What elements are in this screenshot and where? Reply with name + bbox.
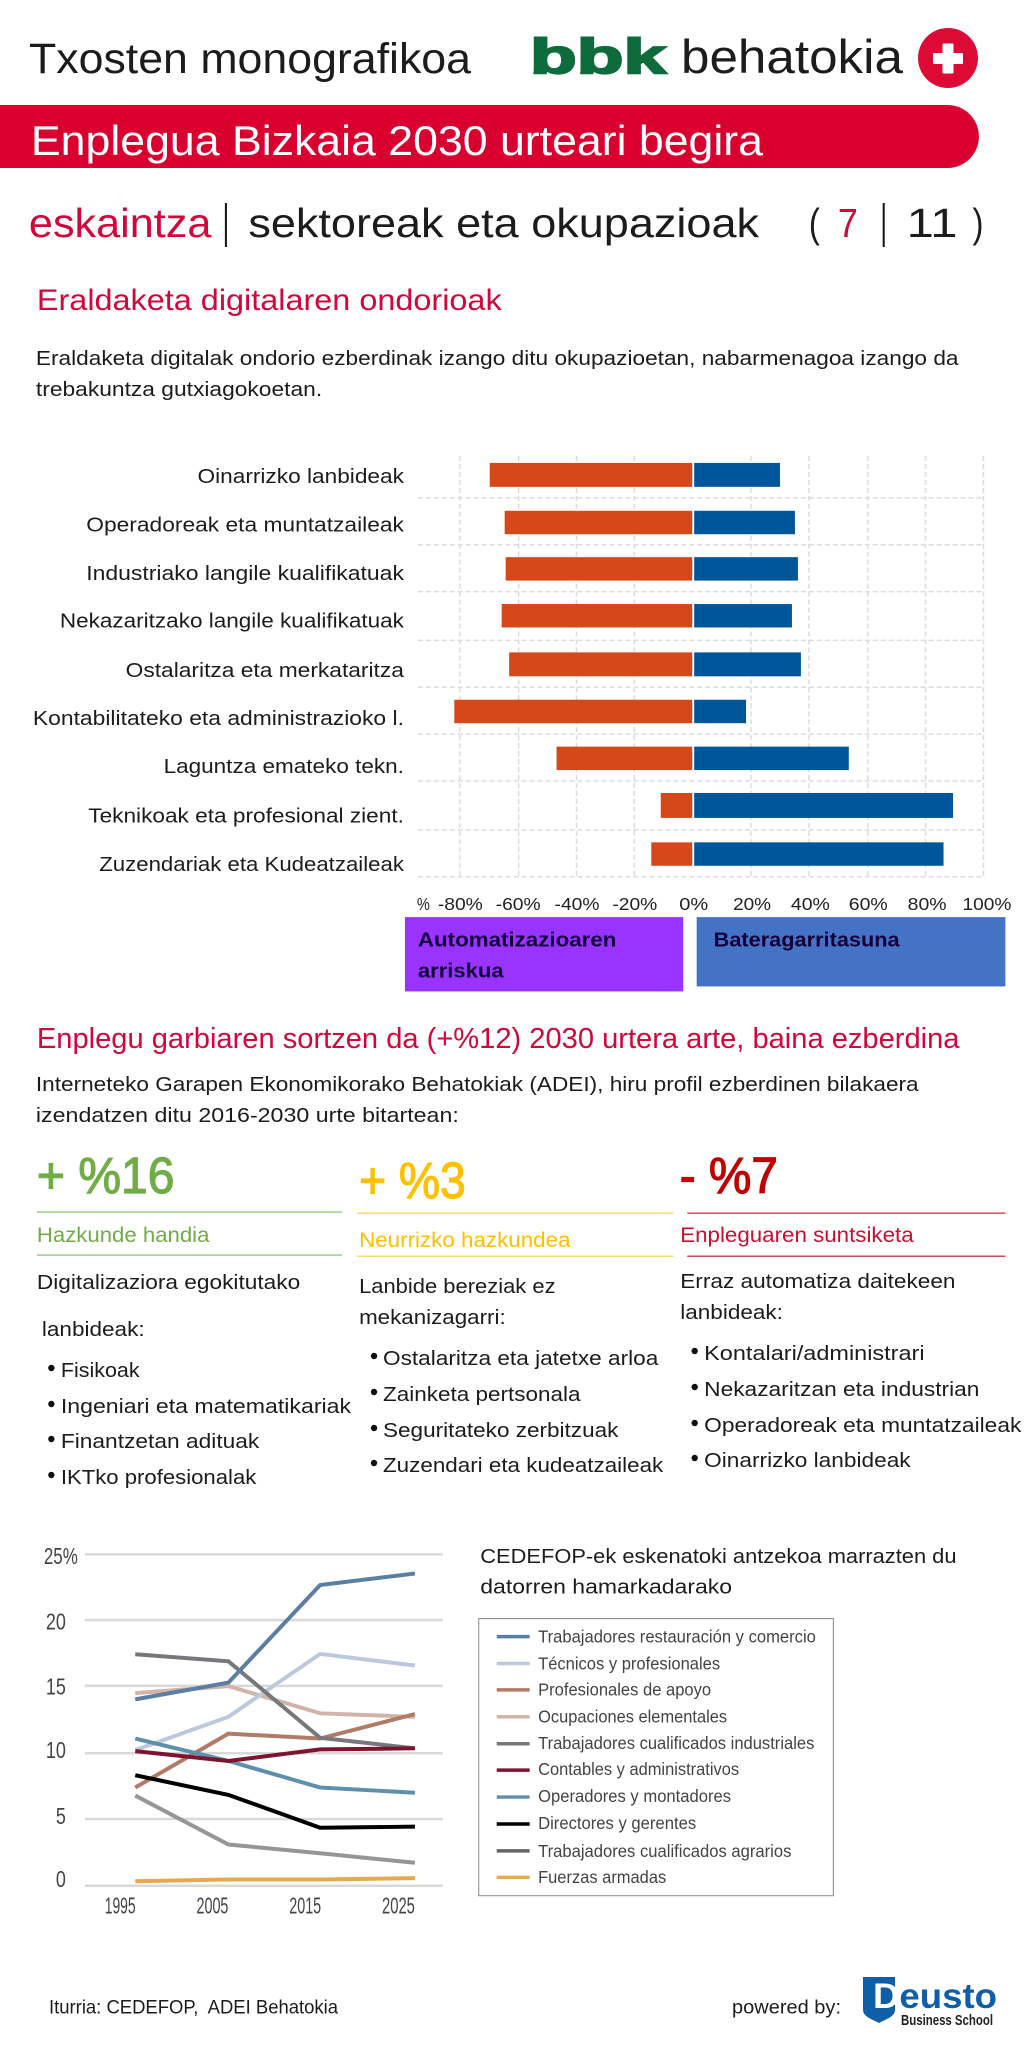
category labels: Operadoreak eta muntatzaileak	[86, 514, 405, 537]
axis labels: -80%	[438, 894, 483, 914]
axis labels: -20%	[612, 894, 657, 914]
panel: high growth	[37, 1147, 352, 1489]
description: lanbideak:	[42, 1318, 145, 1341]
description	[359, 1275, 556, 1329]
list: Kontalari/administrari	[704, 1342, 925, 1365]
list: Finantzetan adituak	[61, 1430, 260, 1453]
x axis labels	[105, 1893, 415, 1919]
intro text: izendatzen ditu 2016-2030 urte bitartean:	[36, 1104, 459, 1127]
list: Nekazaritzan eta industrian	[704, 1378, 979, 1401]
footer	[49, 1977, 997, 2029]
axis labels: 0%	[679, 894, 708, 914]
list: Fisikoak	[61, 1359, 140, 1382]
text: CEDEFOP note: datorren hamarkadarako	[480, 1576, 732, 1599]
data lines	[135, 1573, 415, 1881]
y axis labels: 20	[46, 1609, 66, 1635]
category labels: Teknikoak eta profesional zient.	[88, 804, 404, 827]
list: Seguritateko zerbitzuak	[383, 1419, 619, 1442]
stat: + %3	[359, 1152, 466, 1209]
list	[371, 1347, 664, 1477]
header	[29, 28, 978, 88]
intro text: trebakuntza gutxiagokoetan.	[36, 378, 322, 401]
axis labels: 80%	[908, 894, 947, 914]
legend box: compatibility	[697, 917, 1005, 986]
axis labels: 40%	[791, 894, 830, 914]
subtitle line: sektoreak eta okupazioak	[248, 200, 760, 246]
bars: automation risk	[454, 463, 692, 866]
description	[37, 1271, 300, 1341]
category labels: Zuzendariak eta Kudeatzaileak	[99, 853, 405, 876]
category labels: Laguntza emateko tekn.	[164, 755, 404, 778]
powered by: powered by:	[732, 1996, 841, 2018]
intro text	[36, 1073, 919, 1127]
intro text: Interneteko Garapen Ekonomikorako Behatokiak (ADEI), hiru profil ezberdinen bilakaera	[36, 1073, 919, 1096]
y axis labels: 15	[46, 1673, 66, 1699]
description	[680, 1270, 956, 1324]
section: digital transformation	[36, 284, 959, 401]
heading: Enplegu garbiaren sortzen da (+%12) 2030 urtera arte, baina ezberdina	[37, 1023, 960, 1055]
legend box: automation risk: Automatizazioaren	[418, 929, 616, 952]
banner: main title	[0, 105, 979, 168]
logo: Deusto Business School	[863, 1977, 997, 2029]
logo: Deusto Business School: Deusto	[873, 1977, 997, 2016]
panel: job destruction	[680, 1147, 1022, 1472]
source: Iturria: CEDEFOP, ADEI Behatokia	[49, 1996, 338, 2018]
label: Enpleguaren suntsiketa	[680, 1223, 914, 1247]
y axis labels: 25%	[44, 1543, 78, 1569]
subtitle line: eskaintza	[29, 200, 212, 246]
description: Lanbide bereziak ez	[359, 1275, 556, 1298]
y axis labels: 0	[56, 1866, 66, 1892]
label: Neurrizko hazkundea	[359, 1228, 571, 1252]
stat: + %16	[37, 1147, 175, 1204]
panel: moderate growth	[357, 1152, 673, 1477]
y axis labels	[44, 1543, 78, 1892]
x axis labels: 2025	[382, 1893, 415, 1919]
logo: bbk behatokia: behatokia	[681, 30, 904, 83]
axis labels: -40%	[555, 894, 599, 914]
stat: - %7	[680, 1147, 778, 1204]
y axis labels: 10	[46, 1737, 66, 1763]
list: Ingeniari eta matematikariak	[61, 1395, 352, 1418]
subtitle line: 11	[907, 200, 958, 246]
intro text	[36, 347, 959, 401]
legend: line chart: Trabajadores cualificados industriales	[538, 1733, 815, 1753]
x axis labels: 1995	[105, 1893, 136, 1919]
list: Zuzendari eta kudeatzaileak	[383, 1454, 664, 1477]
line chart: CEDEFOP occupations	[44, 1543, 443, 1919]
category labels: Industriako langile kualifikatuak	[86, 562, 405, 585]
legend: line chart: Contables y administrativos	[538, 1759, 739, 1779]
category labels: Ostalaritza eta merkataritza	[126, 659, 405, 682]
legend box: automation risk	[405, 917, 683, 991]
legend: line chart: Técnicos y profesionales	[538, 1653, 720, 1673]
section: net employment	[36, 1023, 960, 1127]
legend: line chart: Operadores y montadores	[538, 1786, 731, 1806]
heading: Eraldaketa digitalaren ondorioak	[37, 284, 503, 317]
x axis labels: 2005	[196, 1893, 228, 1919]
axis labels	[417, 894, 1011, 914]
list	[48, 1359, 352, 1489]
text: CEDEFOP note	[480, 1545, 957, 1599]
category labels: Kontabilitateko eta administrazioko l.	[33, 707, 404, 730]
subtitle line: )	[972, 200, 983, 246]
category labels	[33, 465, 405, 876]
description: Digitalizaziora egokitutako	[37, 1271, 300, 1294]
category labels: Oinarrizko lanbideak	[197, 465, 405, 488]
banner: main title: Enplegua Bizkaia 2030 urteari begira	[31, 117, 764, 164]
y axis labels: 5	[56, 1803, 66, 1829]
legend: line chart: Fuerzas armadas	[538, 1867, 667, 1887]
axis labels: 60%	[849, 894, 888, 914]
list: Oinarrizko lanbideak	[704, 1449, 911, 1472]
legend: line chart: Trabajadores cualificados agrarios	[538, 1841, 792, 1861]
logo: bbk behatokia: bbk	[530, 30, 667, 84]
legend box: compatibility: Bateragarritasuna	[714, 929, 900, 952]
logo: bbk behatokia	[530, 28, 978, 88]
legend: line chart: Ocupaciones elementales	[538, 1706, 727, 1726]
axis labels: %	[417, 894, 430, 914]
label: Hazkunde handia	[37, 1223, 210, 1247]
subtitle line: 7	[838, 200, 858, 246]
description: lanbideak:	[680, 1301, 783, 1324]
diverging bar chart	[33, 456, 1011, 991]
intro text: Eraldaketa digitalak ondorio ezberdinak izango ditu okupazioetan, nabarmenagoa izango da	[36, 347, 959, 370]
legend: line chart: Directores y gerentes	[538, 1813, 696, 1833]
legend: line chart	[479, 1619, 833, 1896]
bars: compatibility	[694, 463, 953, 866]
list: Operadoreak eta muntatzaileak	[704, 1414, 1022, 1437]
list: IKTko profesionalak	[61, 1466, 257, 1489]
legend box: automation risk: arriskua	[418, 959, 504, 982]
list: Zainketa pertsonala	[383, 1383, 581, 1406]
text: CEDEFOP note: CEDEFOP-ek eskenatoki antzekoa marrazten du	[480, 1545, 957, 1568]
subtitle line	[29, 200, 983, 247]
legend: line chart: Trabajadores restauración y comercio	[538, 1627, 816, 1647]
description: Erraz automatiza daitekeen	[680, 1270, 956, 1293]
axis labels: 20%	[733, 894, 771, 914]
x axis labels: 2015	[289, 1893, 321, 1919]
logo: Deusto Business School: Business School	[901, 2013, 993, 2029]
subtitle line: (	[809, 200, 820, 246]
list	[691, 1342, 1022, 1472]
axis labels: 100%	[962, 894, 1011, 914]
list: Ostalaritza eta jatetxe arloa	[383, 1347, 659, 1370]
category labels: Nekazaritzako langile kualifikatuak	[60, 609, 405, 632]
axis labels: -60%	[496, 894, 541, 914]
title: report type: Txosten monografikoa	[29, 35, 471, 83]
description: mekanizagarri:	[359, 1306, 506, 1329]
legend: line chart: Profesionales de apoyo	[538, 1679, 711, 1699]
